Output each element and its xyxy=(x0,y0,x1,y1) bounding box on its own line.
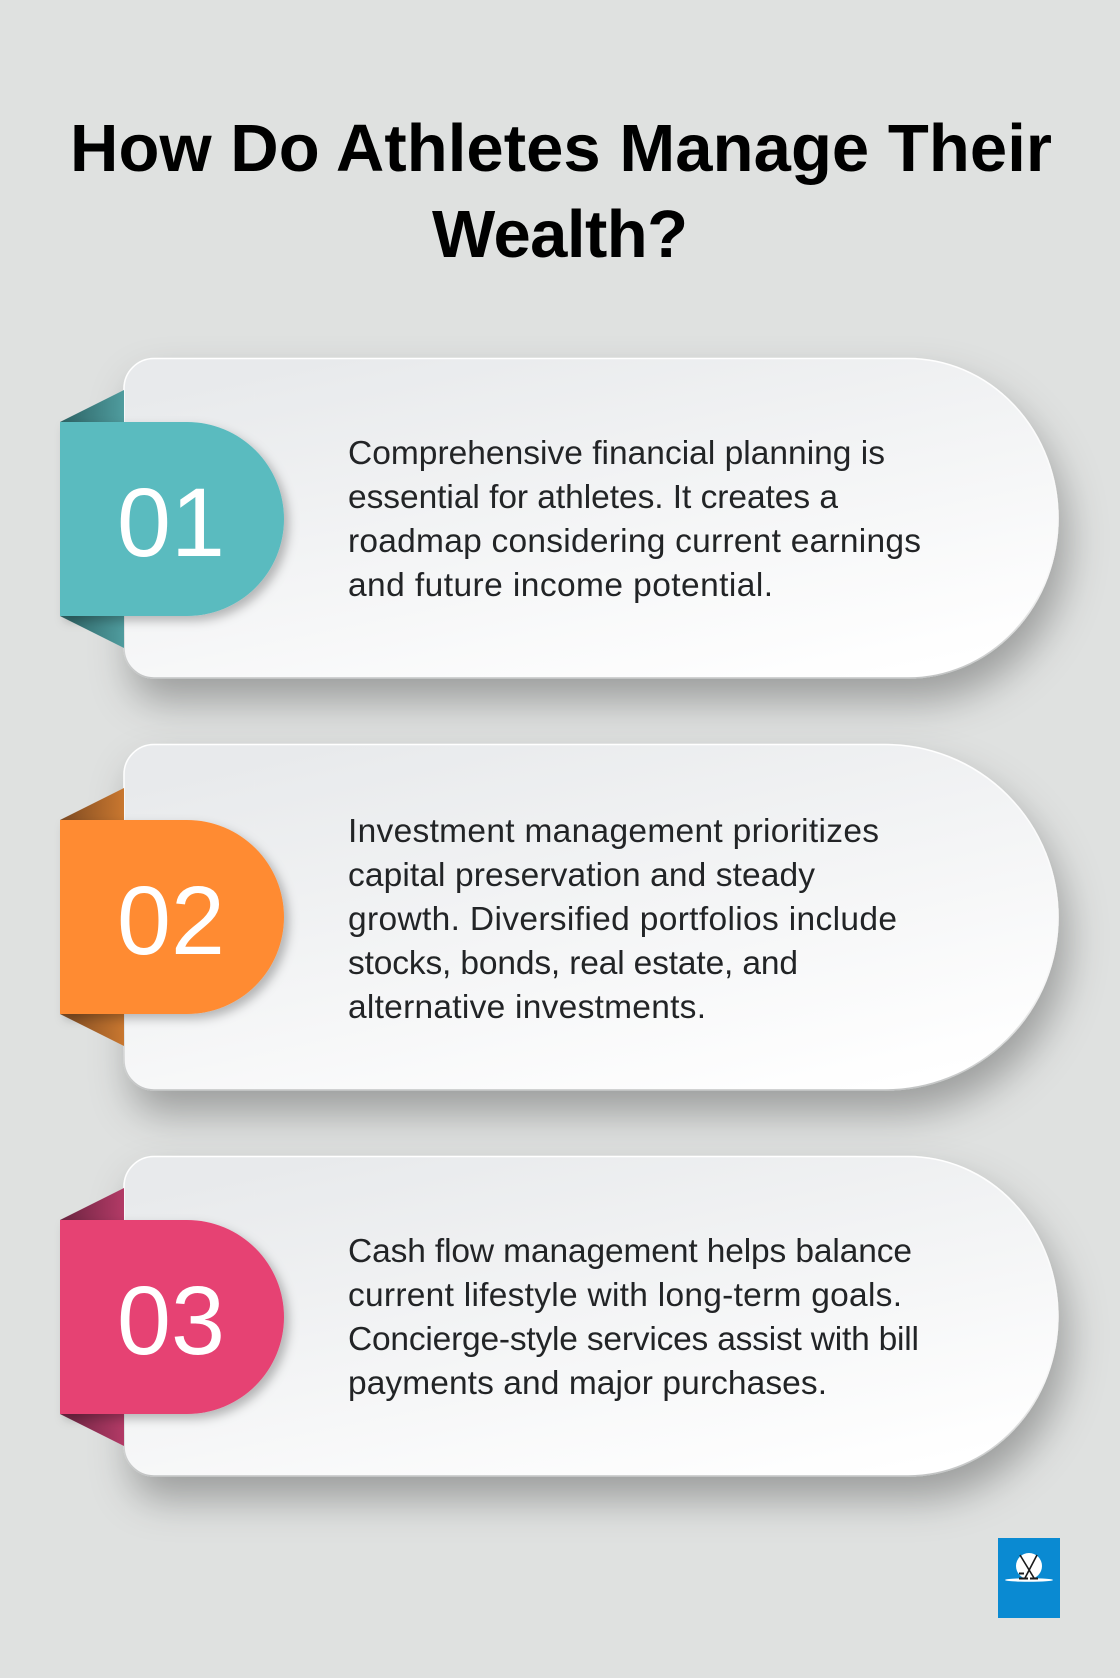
number 01: 01 xyxy=(117,468,225,577)
text 01 xyxy=(348,435,921,604)
card 02 xyxy=(124,744,1058,1090)
text 03: Cash flow management helps balance xyxy=(348,1233,912,1270)
card 01 xyxy=(124,358,1058,678)
text 03: payments and major purchases. xyxy=(348,1365,827,1402)
text 02: capital preservation and steady xyxy=(348,857,815,894)
title xyxy=(70,111,1052,272)
title: Wealth? xyxy=(432,197,688,272)
panel: step 01 xyxy=(60,358,1058,678)
badge 01 xyxy=(60,422,284,616)
text 01: and future income potential. xyxy=(348,567,773,604)
ribbon folds 01 xyxy=(60,390,124,648)
text 03 xyxy=(348,1233,919,1402)
badge 03 xyxy=(60,1220,284,1414)
text 03: Concierge-style services assist with bill xyxy=(348,1321,919,1358)
text 01: Comprehensive financial planning is xyxy=(348,435,885,472)
text 01: roadmap considering current earnings xyxy=(348,523,921,560)
title: How Do Athletes Manage Their xyxy=(70,111,1052,186)
text 02: alternative investments. xyxy=(348,989,706,1026)
panel: step 03 xyxy=(60,1156,1058,1476)
text 02 xyxy=(348,813,897,1026)
panel: step 02 xyxy=(60,744,1058,1090)
number 02: 02 xyxy=(117,866,225,975)
text 02: stocks, bonds, real estate, and xyxy=(348,945,798,982)
ribbon folds 03 xyxy=(60,1188,124,1446)
card 03 xyxy=(124,1156,1058,1476)
text 03: current lifestyle with long-term goals. xyxy=(348,1277,902,1314)
text 02: growth. Diversified portfolios include xyxy=(348,901,897,938)
icon: hockey sticks logo xyxy=(998,1538,1060,1618)
text 02: Investment management prioritizes xyxy=(348,813,879,850)
ribbon folds 02 xyxy=(60,788,124,1046)
badge 02 xyxy=(60,820,284,1014)
text 01: essential for athletes. It creates a xyxy=(348,479,838,516)
number 03: 03 xyxy=(117,1266,225,1375)
